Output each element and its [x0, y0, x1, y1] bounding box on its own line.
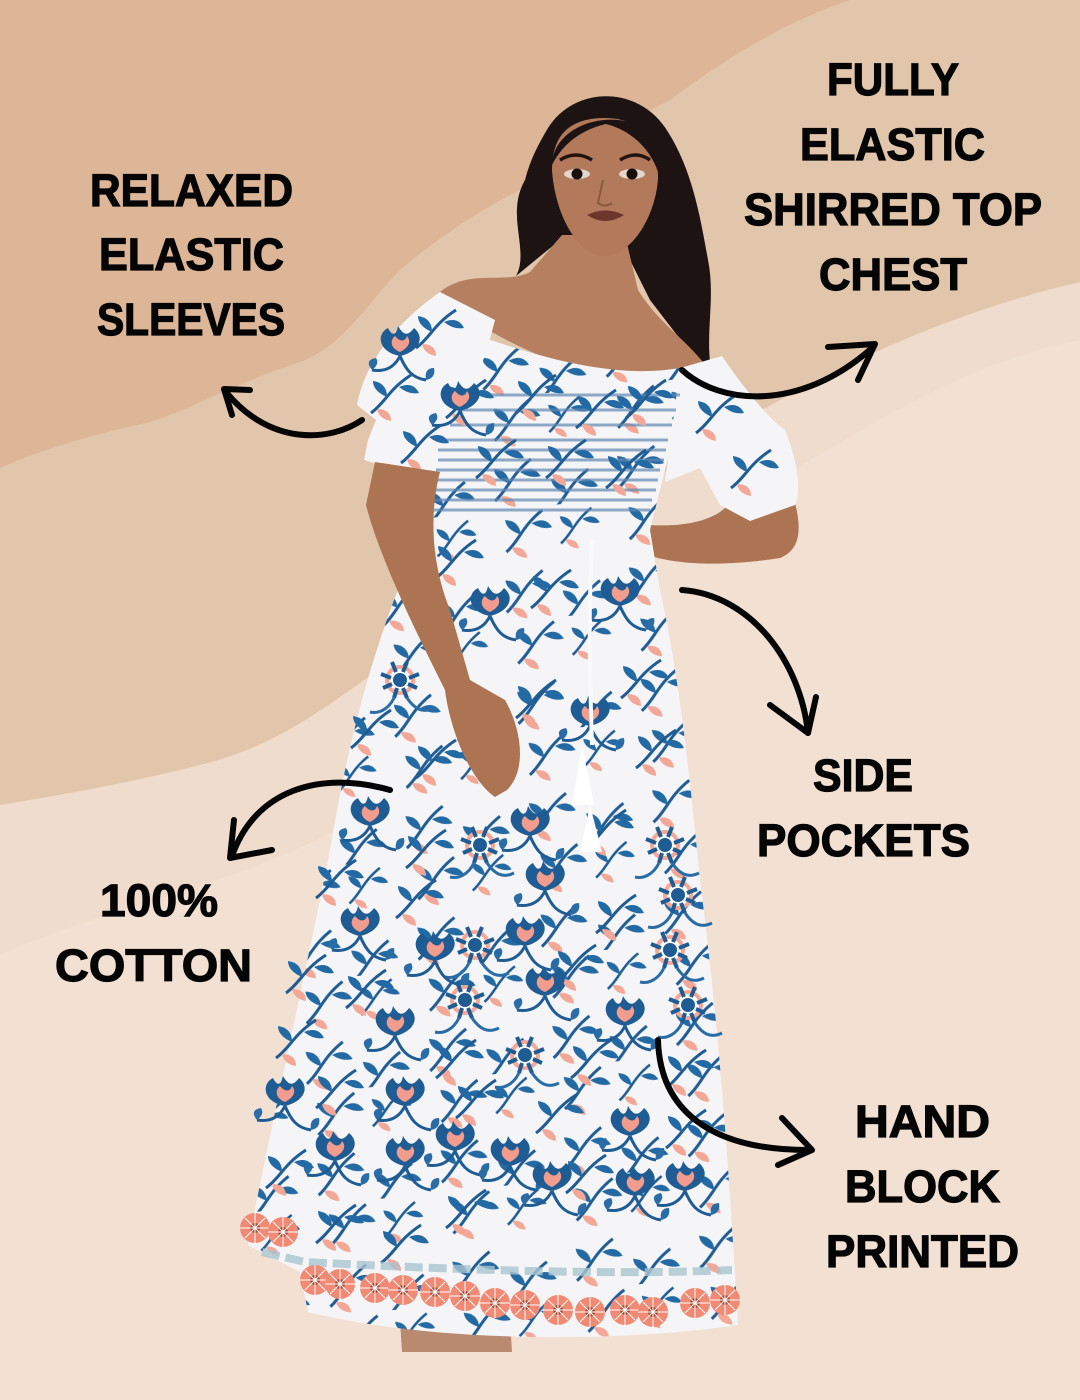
- label: fully elastic shirred top chest: CHEST: [819, 249, 967, 300]
- hair back: [516, 96, 712, 375]
- dress background print: [240, 320, 750, 1350]
- label: fully elastic shirred top chest: [744, 54, 1042, 300]
- hair front: [552, 120, 659, 172]
- label: fully elastic shirred top chest: FULLY: [827, 54, 959, 105]
- facial features: [560, 155, 650, 221]
- label: 100% cotton: [55, 875, 252, 991]
- label: relaxed elastic sleeves: RELAXED: [90, 165, 293, 216]
- label: fully elastic shirred top chest: ELASTIC: [800, 119, 985, 170]
- hem border flowers: [240, 1213, 740, 1327]
- smocked bodice: [432, 395, 680, 510]
- tassel: [572, 540, 602, 852]
- legs and feet: [400, 1320, 512, 1352]
- photo: woman in printed dress: [240, 96, 799, 1352]
- right arm: [648, 503, 799, 564]
- arrow: to sleeves label: [224, 389, 362, 435]
- label: side pockets: POCKETS: [757, 815, 970, 866]
- label: side pockets: SIDE: [813, 750, 913, 801]
- left sleeve: [357, 292, 495, 472]
- label: side pockets: [757, 750, 970, 866]
- right sleeve: [665, 356, 798, 521]
- arrow: to hand block printed label: [658, 1040, 812, 1165]
- arrow: to cotton label: [230, 783, 390, 858]
- label: hand block printed: BLOCK: [845, 1161, 1000, 1212]
- label: relaxed elastic sleeves: [90, 165, 293, 345]
- dress print motifs: [254, 310, 779, 1271]
- neck and chest: [440, 235, 706, 385]
- arrow: to side pockets label: [682, 590, 816, 733]
- left arm and hand: [366, 462, 520, 797]
- label: fully elastic shirred top chest: SHIRRED TOP: [744, 184, 1042, 235]
- hem stripes: [262, 1252, 732, 1272]
- face: [552, 118, 658, 256]
- label: hand block printed: HAND: [855, 1096, 990, 1147]
- label: 100% cotton: 100%: [100, 875, 218, 926]
- label: relaxed elastic sleeves: SLEEVES: [97, 294, 285, 345]
- dress skirt and bodice: [248, 325, 738, 1337]
- label: hand block printed: PRINTED: [826, 1226, 1019, 1277]
- label: relaxed elastic sleeves: ELASTIC: [99, 229, 284, 280]
- label: 100% cotton: COTTON: [55, 940, 252, 991]
- arrow: to shirred top label: [682, 344, 875, 396]
- label: hand block printed: [826, 1096, 1019, 1277]
